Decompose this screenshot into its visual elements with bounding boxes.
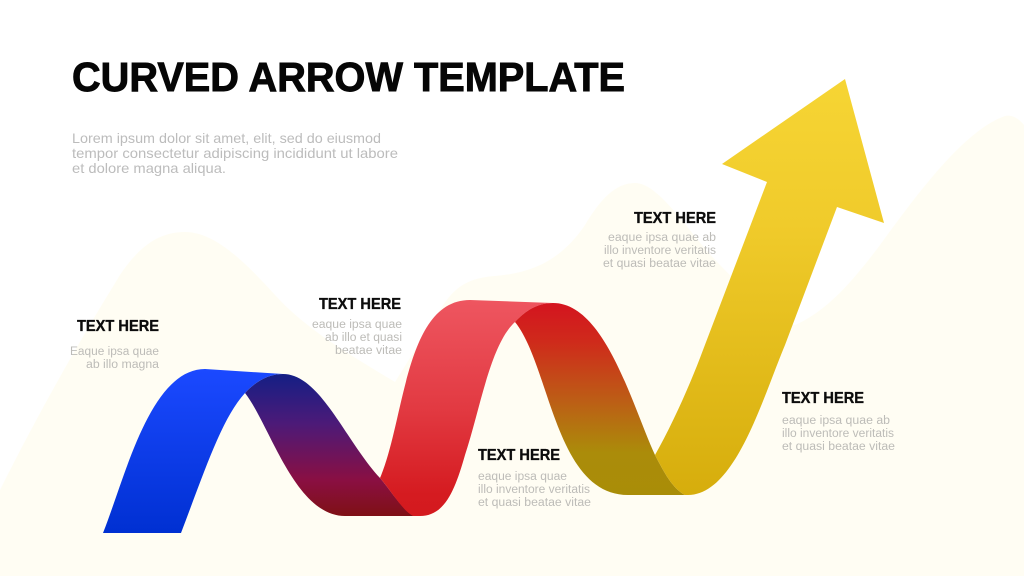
intro text: tempor consectetur adipiscing incididunt ut labore bbox=[72, 145, 398, 161]
callout 1 body bbox=[70, 346, 160, 371]
callout 5 body: et quasi beatae vitae bbox=[782, 441, 895, 453]
callout 1 body: Eaque ipsa quae bbox=[70, 346, 159, 358]
callout 2 body: eaque ipsa quae bbox=[312, 319, 402, 331]
callout 5 bbox=[782, 390, 895, 453]
callout 5 body bbox=[782, 415, 895, 453]
callout 4 heading: TEXT HERE bbox=[634, 210, 716, 227]
callout 4 body bbox=[603, 232, 716, 270]
segment: yellow arrow with head bbox=[655, 79, 884, 495]
callout 4 bbox=[603, 210, 716, 270]
background mountains bbox=[0, 116, 1024, 576]
segment: blue rising band bbox=[103, 369, 283, 533]
callout 5 heading: TEXT HERE bbox=[782, 390, 864, 407]
callout 3 body: et quasi beatae vitae bbox=[478, 497, 591, 509]
callout 1 heading: TEXT HERE bbox=[77, 318, 159, 335]
callout 4 body: eaque ipsa quae ab bbox=[608, 232, 716, 244]
intro text: et dolore magna aliqua. bbox=[72, 160, 226, 176]
callout 3 bbox=[478, 447, 591, 509]
ribbon arrow bbox=[103, 79, 884, 533]
callout 4 body: et quasi beatae vitae bbox=[603, 258, 716, 270]
callout 2 heading: TEXT HERE bbox=[319, 296, 401, 313]
callout 2 body: beatae vitae bbox=[335, 345, 402, 357]
callout 1 bbox=[70, 318, 160, 371]
callout 3 body bbox=[478, 471, 591, 509]
callout 3 heading: TEXT HERE bbox=[478, 447, 560, 464]
callout 4 body: illo inventore veritatis bbox=[604, 245, 716, 257]
segment: red rising band bbox=[380, 300, 553, 516]
segment: red to olive fold bbox=[515, 303, 685, 495]
segment: dark blue to maroon fold bbox=[245, 374, 415, 516]
callout 3 body: illo inventore veritatis bbox=[478, 484, 590, 496]
intro text: Lorem ipsum dolor sit amet, elit, sed do eiusmod bbox=[72, 130, 381, 146]
callout 2 body bbox=[312, 319, 402, 357]
callout 3 body: eaque ipsa quae bbox=[478, 471, 567, 483]
callout 5 body: illo inventore veritatis bbox=[782, 428, 894, 440]
callout 5 body: eaque ipsa quae ab bbox=[782, 415, 890, 427]
intro text bbox=[72, 130, 398, 176]
callout 2 bbox=[312, 296, 402, 357]
callout 1 body: ab illo magna bbox=[86, 359, 160, 371]
callout 2 body: ab illo et quasi bbox=[325, 332, 402, 344]
title: CURVED ARROW TEMPLATE bbox=[72, 54, 625, 100]
